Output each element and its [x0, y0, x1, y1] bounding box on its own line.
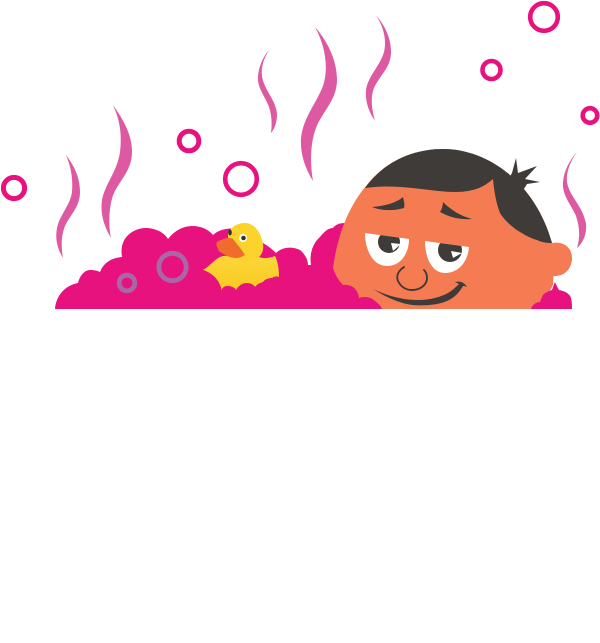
ear	[552, 243, 572, 276]
illustration: man relaxing in a bubble bath	[0, 0, 600, 309]
purple bubbles in foam	[119, 253, 186, 291]
duck bill	[216, 238, 245, 258]
foam in front of man: left	[320, 268, 382, 309]
bubbles	[3, 3, 597, 199]
hair	[365, 149, 552, 243]
foam in front of duck	[205, 276, 295, 309]
steam wisps	[56, 15, 586, 258]
left eye	[365, 231, 409, 266]
man	[333, 149, 572, 309]
foam in front of man: right	[531, 282, 572, 309]
hair spikes	[508, 158, 540, 192]
duck eyes	[239, 234, 247, 242]
right eye	[425, 238, 469, 273]
head	[333, 149, 554, 309]
nose	[397, 267, 427, 290]
mouth	[373, 282, 467, 305]
duck head	[228, 223, 263, 262]
duck body	[203, 256, 279, 292]
foam: back mass	[55, 223, 352, 309]
rubber duck	[203, 223, 279, 292]
eyebrows	[372, 197, 404, 210]
